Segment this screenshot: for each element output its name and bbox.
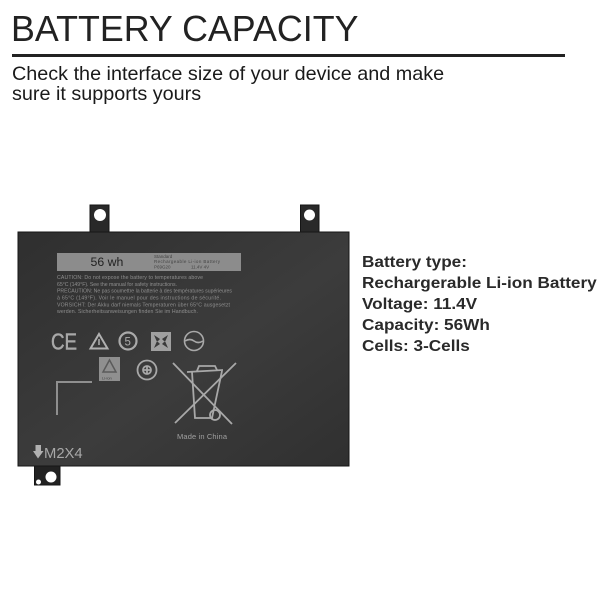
battery specifications: Cells: 3-Cells	[362, 338, 470, 355]
icon: target circle	[138, 360, 156, 380]
mounting tab: top right	[300, 205, 319, 233]
screw marker M2X4: M2X4	[44, 446, 83, 462]
corner mark	[57, 382, 92, 415]
battery body	[18, 232, 349, 466]
battery illustration	[18, 204, 350, 486]
caution text	[57, 275, 232, 315]
icon: CE mark: CE	[51, 328, 77, 354]
intro text: Check the interface size of your device and make	[12, 63, 444, 85]
icon: recycling badge	[99, 357, 120, 381]
heading rule	[12, 54, 565, 57]
caution text: werden. Sicherheitsanweisungen finden Sie im Handbuch.	[57, 309, 198, 315]
battery specifications: Battery type:	[362, 254, 467, 271]
icon: 5-year circle	[120, 332, 136, 350]
caution text: 65°C (149°F). See the manual for safety instructions.	[57, 282, 177, 288]
caution text: à 65°C (149°F). Voir le manuel pour des instructions de sécurité.	[57, 296, 221, 302]
icon: 5-year circle: 5	[124, 336, 131, 348]
battery specifications: Capacity: 56Wh	[362, 317, 490, 334]
icon: circle with wave	[184, 332, 204, 350]
made in china text: Made in China	[177, 432, 228, 441]
battery specifications: Rechargerable Li-ion Battery	[362, 275, 597, 292]
battery label strip: Rechargeable Li-ion Battery	[154, 259, 221, 264]
mounting tab: top left	[90, 205, 109, 233]
intro text	[12, 63, 444, 105]
battery specifications	[362, 254, 597, 355]
mounting tab: bottom	[34, 465, 60, 485]
battery specifications: Voltage: 11.4V	[362, 296, 477, 313]
battery label strip: 56 wh	[90, 255, 123, 269]
icon: square emblem	[151, 332, 171, 351]
icon: recycling badge: Li-ion	[102, 376, 112, 380]
icon: crossed-out bin	[173, 363, 236, 424]
intro text: sure it supports yours	[12, 83, 201, 105]
battery label strip	[57, 253, 241, 271]
battery label strip: Standard	[154, 254, 173, 259]
caution text: VORSICHT: Der Akku darf niemals Temperaturen über 65°C ausgesetzt	[57, 302, 231, 308]
caution text: CAUTION: Do not expose the battery to temperatures above	[57, 275, 203, 281]
icon: warning triangle	[90, 334, 108, 348]
battery label strip: P69G20	[154, 264, 171, 270]
title: BATTERY CAPACITY	[11, 9, 358, 49]
caution text: PRECAUTION: Ne pas soumettre la batterie à des températures supérieures	[57, 288, 232, 294]
battery label strip: 11.4V 4V	[191, 264, 209, 270]
